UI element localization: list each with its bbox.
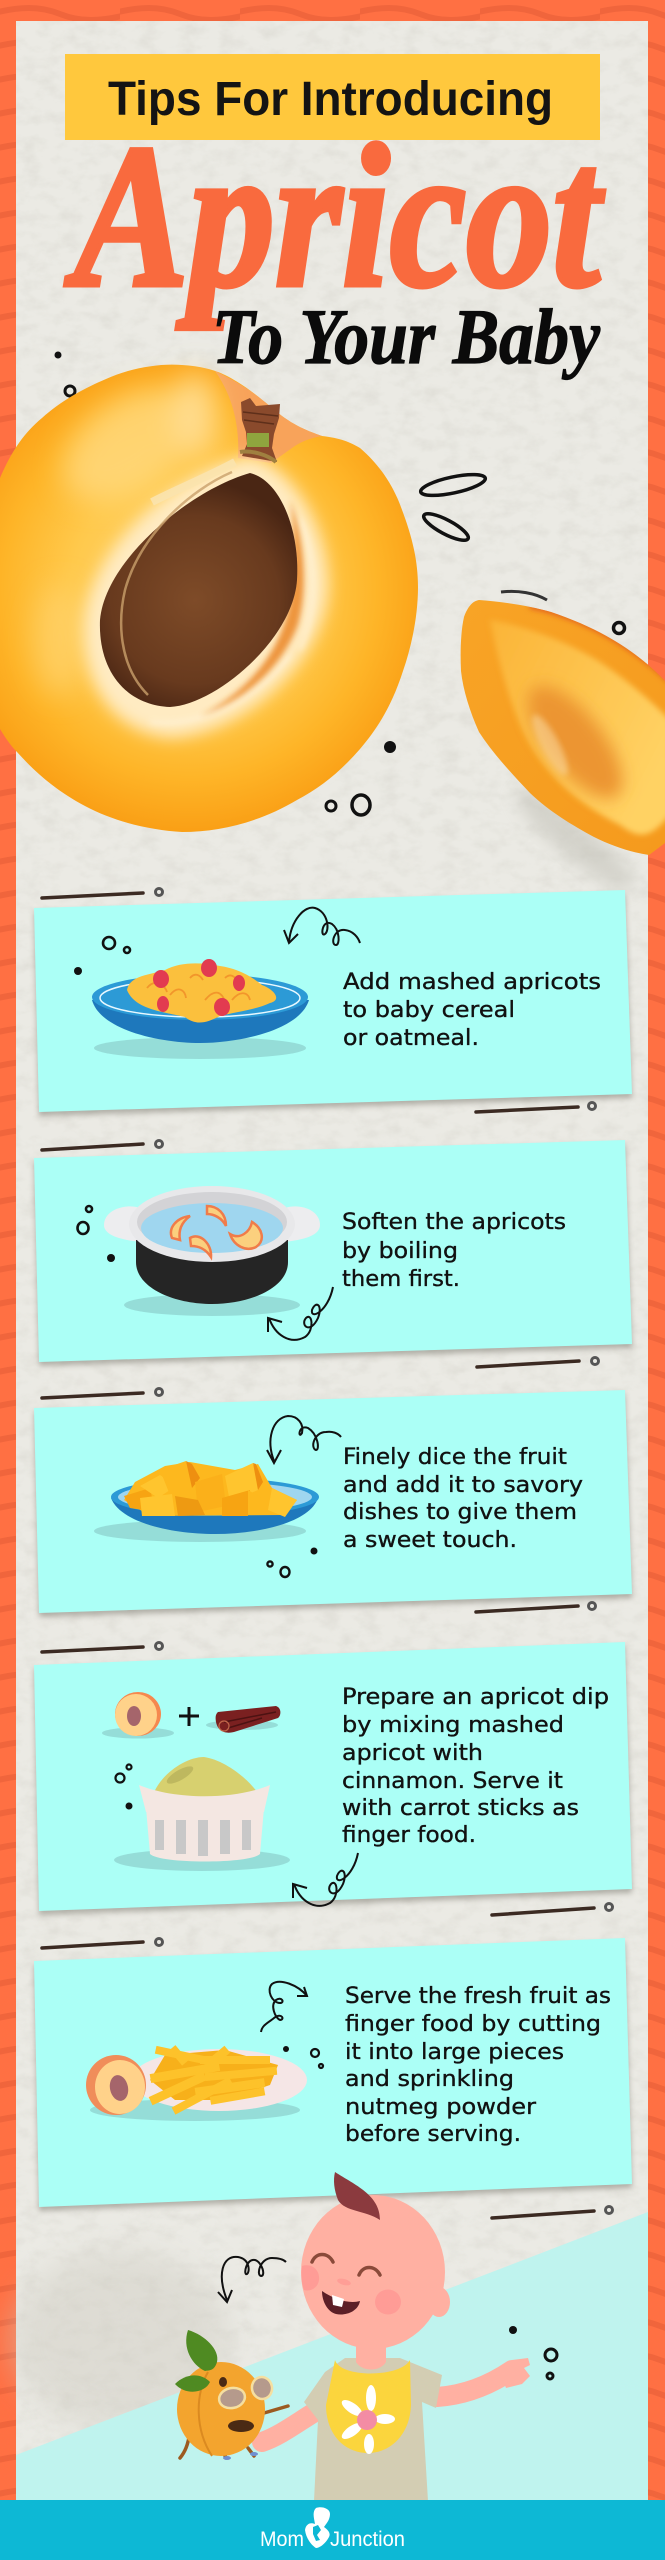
pale halo around pit [84, 456, 328, 738]
title: To Your Baby: To Your Baby [212, 293, 600, 380]
icon: plate of apricot sticks [86, 2045, 307, 2121]
text: Prepare an apricot dip [342, 1684, 609, 1710]
icon: ramekin of dip [114, 1757, 290, 1871]
card panel [34, 1140, 632, 1362]
squiggle arrow [293, 1853, 358, 1906]
card 3 [34, 1388, 632, 1617]
icon: bowl of diced apricot [94, 1461, 319, 1542]
apricot slice photo [461, 600, 665, 902]
card 2 [34, 1140, 632, 1367]
baby eyes [312, 2254, 380, 2275]
apricot half photo [0, 365, 418, 832]
doodles around title [54, 352, 75, 396]
sunglasses [217, 2375, 274, 2410]
text [345, 1983, 611, 2147]
fibres below pit [150, 520, 314, 723]
leaves [186, 2330, 217, 2371]
text [343, 1444, 583, 1553]
baby ear [428, 2287, 450, 2317]
decorative rules [42, 1140, 598, 1367]
card shadow [34, 1144, 632, 1366]
stem [240, 398, 280, 462]
logo text: Mom [260, 2528, 304, 2551]
text: by boiling [342, 1238, 458, 1264]
skin above the stem [215, 371, 322, 463]
squiggle arrow near baby [218, 2257, 286, 2302]
text [342, 1209, 566, 1292]
card panel [34, 890, 632, 1112]
doodles [74, 937, 130, 975]
baby bib [326, 2360, 411, 2454]
text: a sweet touch. [343, 1527, 517, 1553]
icon: bowl of mash [92, 959, 309, 1059]
text: before serving. [345, 2121, 521, 2147]
baby shirt [304, 2358, 442, 2501]
orange shading right of pit [200, 500, 304, 716]
text: apricot with [342, 1740, 483, 1766]
body [177, 2362, 265, 2456]
text: nutmeg powder [345, 2094, 537, 2120]
text [343, 969, 601, 1051]
text: to baby cereal [343, 997, 515, 1023]
pit fibre line [121, 472, 232, 695]
baby mouth [322, 2291, 360, 2314]
text: Add mashed apricots [343, 969, 601, 995]
text: it into large pieces [345, 2039, 564, 2065]
stem hole [219, 2377, 227, 2387]
icon: cinnamon sticks [206, 1706, 280, 1733]
text: cinnamon. Serve it [342, 1768, 563, 1794]
squiggle arrow [267, 1416, 341, 1463]
feet [223, 2452, 258, 2460]
text: dishes to give them [343, 1499, 577, 1525]
decorative rules [42, 1388, 596, 1612]
card 4 [34, 1642, 632, 1915]
baby arms [262, 2370, 512, 2442]
baby head [301, 2195, 445, 2349]
flower [339, 2385, 395, 2454]
footer bar [0, 2500, 665, 2560]
text [342, 1684, 609, 1848]
baby neck [356, 2345, 386, 2370]
decorative rules [42, 888, 596, 1112]
apricot half [86, 2055, 146, 2115]
flesh highlights [34, 365, 217, 695]
card shadow [34, 1646, 632, 1915]
apricot skin and flesh [0, 365, 418, 832]
mouth [228, 2420, 254, 2432]
card panel [34, 1938, 632, 2207]
text: Finely dice the fruit [343, 1444, 567, 1470]
title banner [65, 54, 600, 140]
slice shading [490, 604, 665, 835]
card shadow [34, 1394, 632, 1617]
plus sign [179, 1707, 199, 1726]
squiggle arrow [284, 908, 360, 945]
card 1 [34, 888, 632, 1116]
text: Serve the fresh fruit as [345, 1983, 611, 2009]
limbs [180, 2406, 288, 2458]
logo text: Junction [330, 2528, 405, 2551]
baby hair [334, 2172, 380, 2220]
decorative rules [42, 1642, 612, 1915]
squiggle arrow [268, 1287, 333, 1340]
doodles [267, 1548, 318, 1577]
text: by mixing mashed [342, 1712, 564, 1738]
title banner: Tips For Introducing [108, 73, 553, 126]
icon: apricot half [102, 1692, 174, 1738]
text: with carrot sticks as [342, 1795, 579, 1821]
baby cheeks [301, 2265, 401, 2314]
text: finger food. [342, 1822, 476, 1848]
doodles [116, 1764, 132, 1810]
teal bottom wedge [16, 2212, 648, 2501]
card panel [34, 1642, 632, 1911]
icon: boiling pot [104, 1186, 320, 1316]
baby character [262, 2172, 530, 2501]
apricot character [175, 2330, 288, 2460]
doodles [283, 2046, 323, 2068]
baby nose [336, 2277, 352, 2287]
text: finger food by cutting [345, 2011, 601, 2037]
logo icon [305, 2507, 330, 2548]
pit [100, 473, 297, 707]
card 5 [34, 1938, 632, 2218]
card shadow [34, 894, 632, 1116]
doodles around fruit [326, 470, 624, 815]
card shadow [34, 1942, 632, 2211]
text: or oatmeal. [343, 1025, 479, 1051]
card panel [34, 1390, 632, 1613]
decorative rules [42, 1938, 612, 2218]
text: them first. [342, 1266, 460, 1292]
doodles near baby hand [509, 2326, 557, 2379]
doodles [78, 1206, 115, 1262]
slice cut face [490, 620, 665, 835]
text: Soften the apricots [342, 1209, 566, 1235]
baby hand [500, 2358, 530, 2388]
text: and add it to savory [343, 1472, 583, 1498]
squiggle arrow [261, 1982, 307, 2032]
text: and sprinkling [345, 2066, 514, 2092]
